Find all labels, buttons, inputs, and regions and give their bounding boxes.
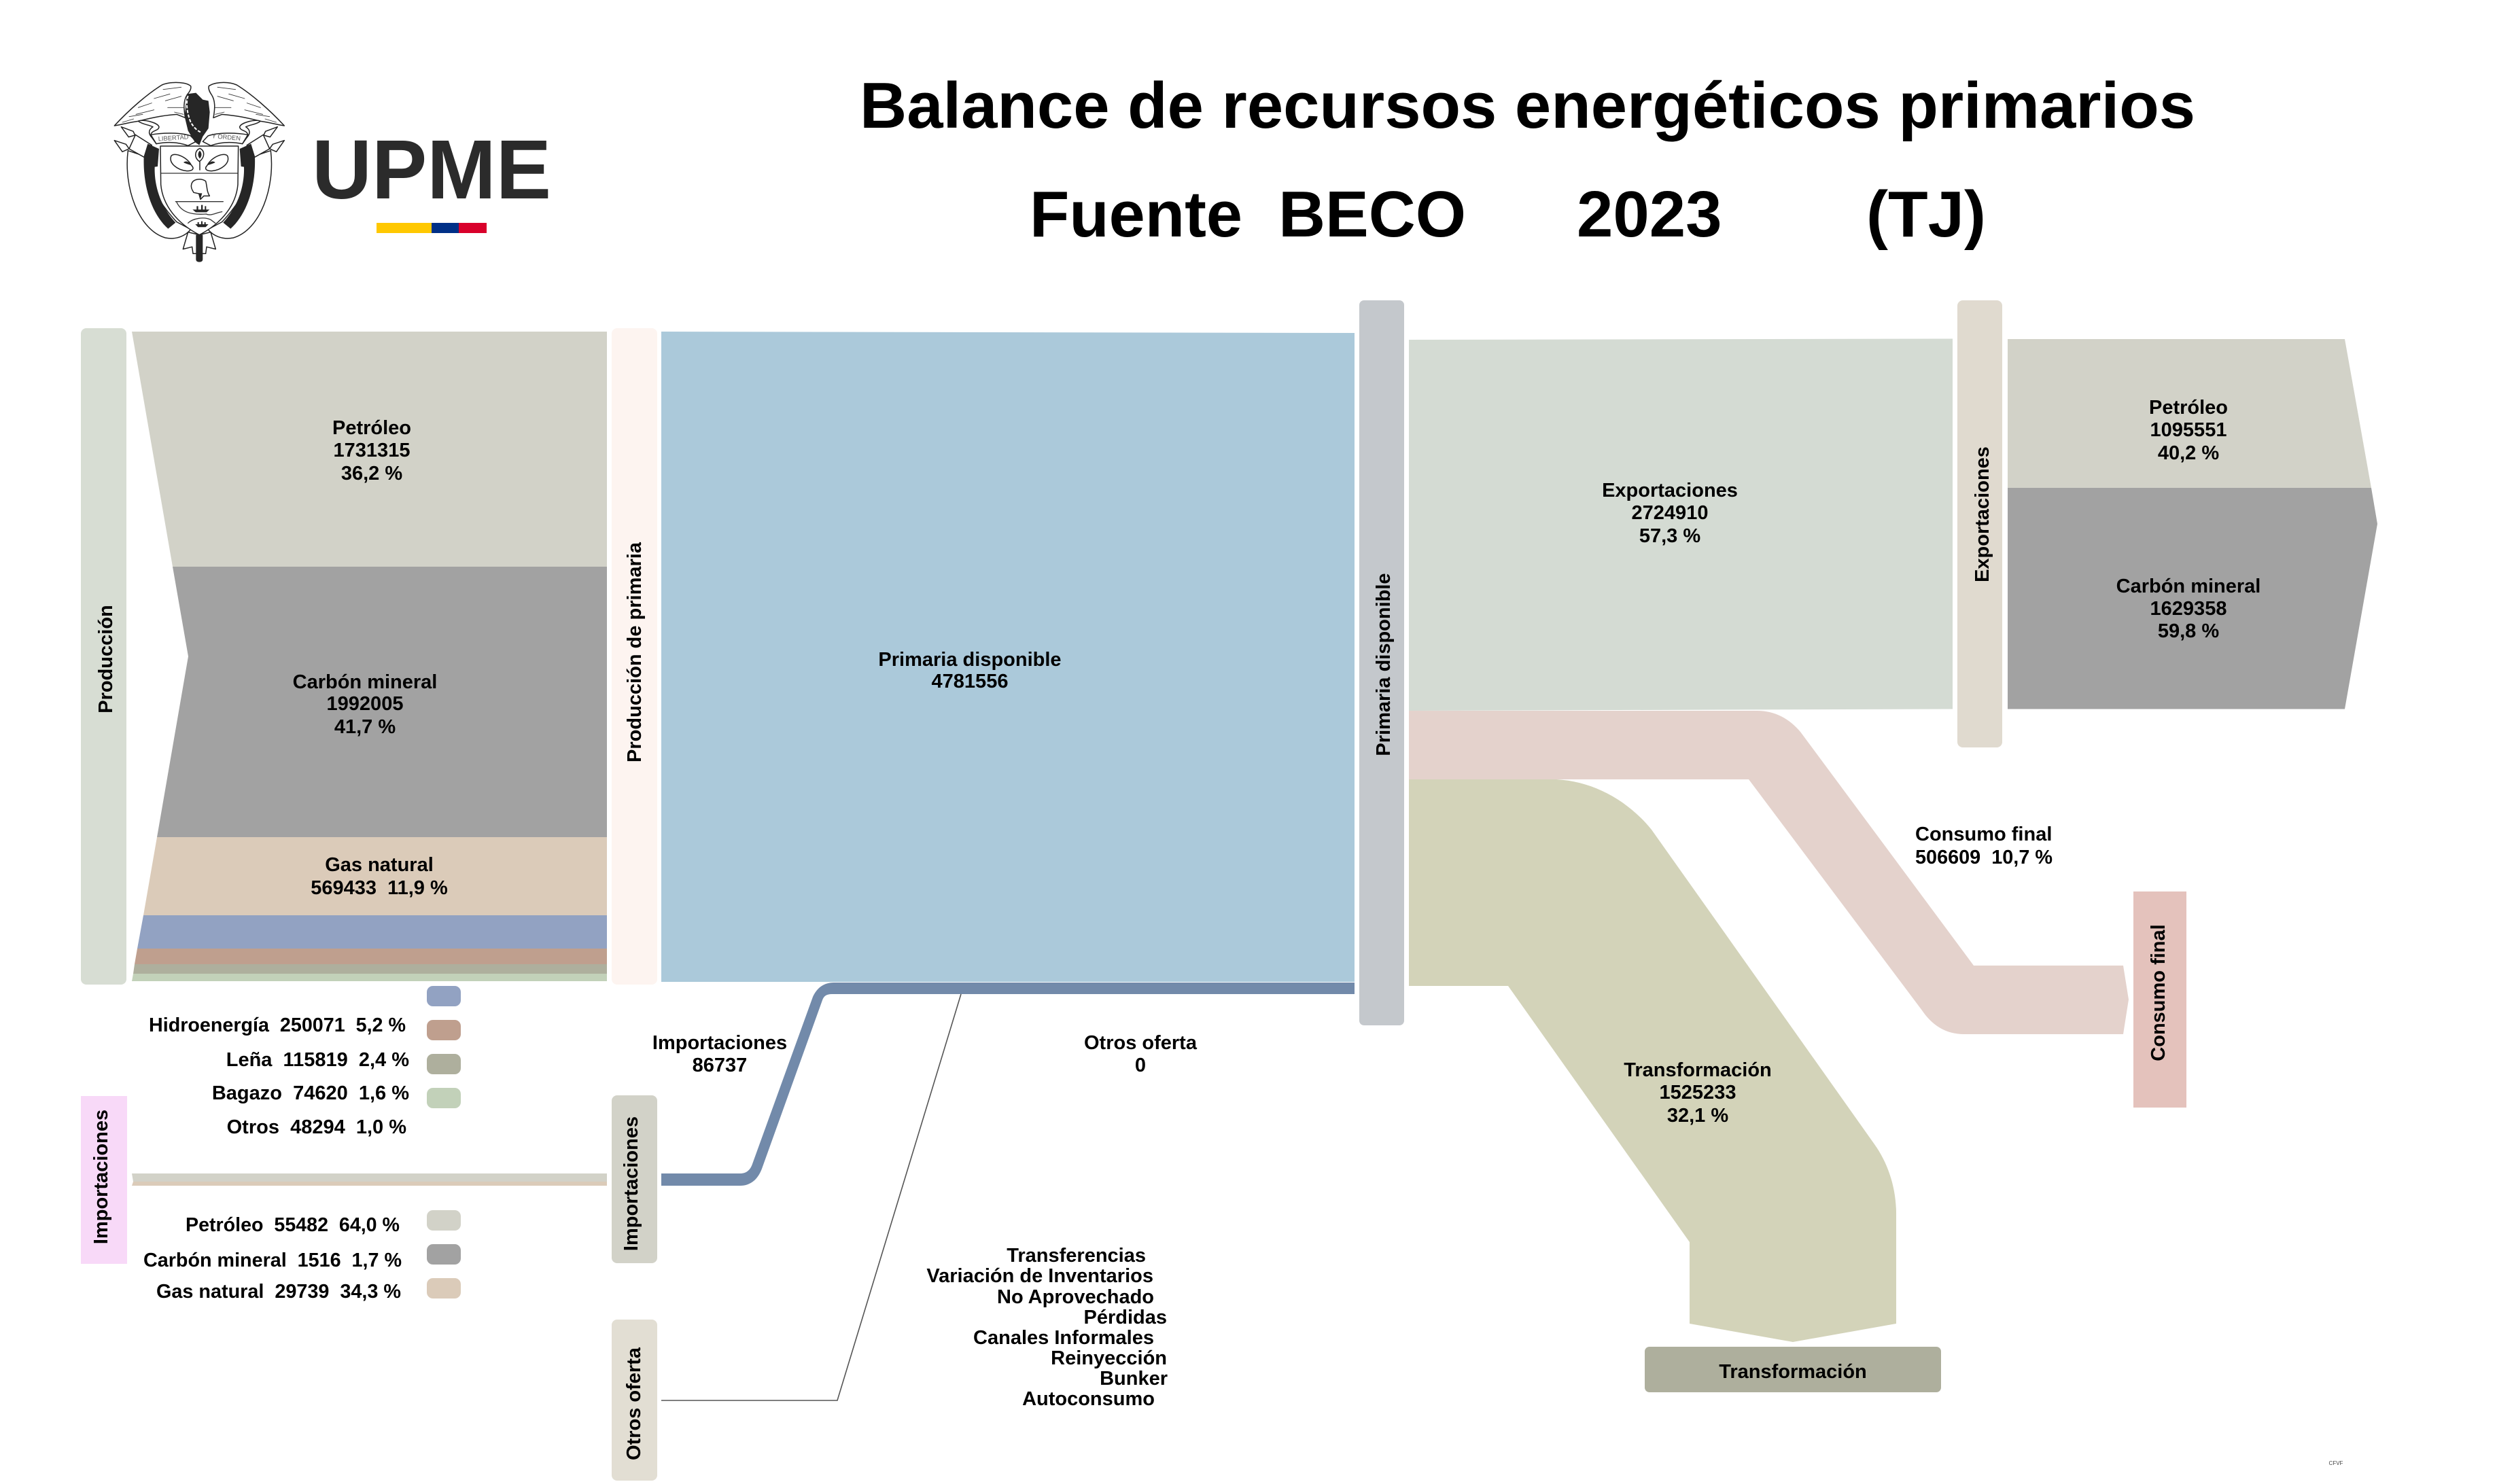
flow: Exportaciones Carbón mineral: 1629358: [2150, 598, 2227, 620]
legend: Carbón mineral: [143, 1244, 461, 1271]
node: Primaria disponible: [1359, 300, 1404, 1025]
legend: Leña: Leña 115819 2,4 %: [226, 1049, 409, 1071]
outer flags: [127, 151, 191, 238]
list: other supply items: [926, 1245, 1168, 1410]
flow: Transformación: 1525233: [1660, 1082, 1736, 1103]
node: Otros oferta: Otros oferta: [623, 1347, 645, 1460]
flow: Exportaciones Carbón mineral: Carbón mineral: [2116, 576, 2260, 597]
label: Importaciones value: 86737: [693, 1055, 747, 1076]
logo: UPME wordmark: UPME: [312, 124, 551, 217]
list: other supply items: Canales Informales: [973, 1327, 1154, 1349]
node: Producción de primaria: [612, 328, 657, 985]
node: Transformación: Transformación: [1719, 1361, 1867, 1383]
flow: imports by source: [132, 1173, 607, 1186]
flow: Exportaciones Petróleo: [2008, 339, 2371, 488]
legend: Otros: [227, 1088, 461, 1138]
flow: Primaria disponible: Primaria disponible: [878, 649, 1062, 671]
label: Consumo final value: 506609 10,7 %: [1915, 847, 2053, 868]
list: other supply items: Autoconsumo: [1022, 1388, 1155, 1410]
flow: Otros: [132, 974, 607, 981]
list: other supply items: Bunker: [1100, 1368, 1168, 1390]
flow: Petróleo: 36,2 %: [341, 463, 402, 484]
node: Exportaciones: Exportaciones: [1972, 446, 1993, 582]
node: Consumo final: Consumo final: [2148, 924, 2169, 1061]
sankey: production flows by source: [132, 332, 607, 981]
footnote mark: CFVF: [2329, 1460, 2343, 1466]
list: other supply items: Pérdidas: [1083, 1307, 1167, 1328]
flow: Importaciones to primary: [661, 983, 1355, 1186]
list: other supply items: Transferencias: [1007, 1245, 1146, 1267]
list: other supply items: Reinyección: [1051, 1347, 1167, 1369]
flow: Otros oferta thin line: [661, 994, 961, 1400]
flow: Bagazo: [133, 964, 607, 974]
legend: production sources: [149, 986, 461, 1138]
node: Transformación: [1645, 1347, 1941, 1392]
flow: Consumo final: [1409, 711, 2129, 1034]
flow: Primaria disponible: [661, 332, 1355, 982]
node: Producción: Producción: [95, 605, 117, 713]
node: Producción: [81, 328, 126, 985]
node: Producción de primaria: Producción de primaria: [624, 542, 646, 762]
flow: Petróleo: Petróleo: [332, 417, 411, 439]
flow: Gas natural: 569433 11,9 %: [311, 877, 448, 899]
black flag bands: [144, 144, 175, 229]
title: [860, 69, 2195, 251]
legend: Carbón mineral: Carbón mineral 1516 1,7 %: [143, 1250, 402, 1271]
flow: Carbón mineral: 41,7 %: [334, 716, 396, 738]
node: Importaciones (right): Importaciones: [621, 1116, 642, 1251]
legend: Petróleo: Petróleo 55482 64,0 %: [186, 1214, 400, 1236]
flow: Exportaciones: 2724910: [1632, 502, 1708, 524]
legend: Hidroenergía: [149, 986, 461, 1036]
label: Consumo final value: Consumo final: [1915, 824, 2052, 845]
label: Otros oferta value: 0: [1135, 1055, 1146, 1076]
flow: Carbón mineral: 1992005: [327, 693, 403, 715]
legend: Petróleo: [186, 1210, 461, 1236]
legend: Hidroenergía: Hidroenergía 250071 5,2 %: [149, 1014, 406, 1036]
wings: [114, 82, 191, 126]
flow: Exportaciones Petróleo: 40,2 %: [2158, 442, 2219, 464]
logo: UPME coat of arms: Y ORDEN: [211, 132, 241, 142]
flow: Petróleo: 1731315: [334, 440, 410, 461]
label: Otros oferta value: [1084, 1032, 1198, 1076]
legend: Gas natural: Gas natural 29739 34,3 %: [156, 1281, 401, 1303]
label: Importaciones value: Importaciones: [652, 1032, 787, 1054]
flow: Exportaciones: Exportaciones: [1602, 480, 1738, 501]
flow: Exportaciones: [1409, 338, 1953, 711]
title: Balance de recursos energéticos primarios: [860, 69, 2195, 142]
node: Primaria disponible: Primaria disponible: [1373, 573, 1395, 756]
logo: UPME coat of arms: LIBERTAD: [158, 133, 189, 143]
legend: Bagazo: [212, 1054, 461, 1104]
node: Importaciones (right): [612, 1095, 657, 1263]
legend: import sources: [143, 1210, 461, 1303]
flow: Exportaciones Carbón mineral: [2008, 488, 2377, 709]
flow: Exportaciones Petróleo: Petróleo: [2149, 397, 2228, 419]
flow: Transformación: [1409, 779, 1896, 1342]
flow: Transformación: 32,1 %: [1667, 1105, 1728, 1127]
motto ribbon: [151, 133, 196, 145]
title: Fuente BECO: [1030, 178, 1466, 251]
flow: Petróleo: [132, 332, 607, 567]
title: (TJ): [1866, 178, 1986, 251]
flow: Exportaciones Petróleo: 1095551: [2150, 419, 2227, 441]
node: Exportaciones: [1957, 300, 2002, 747]
horn and pomegranate: [171, 154, 193, 171]
label: Consumo final value: [1915, 824, 2053, 868]
helmet: [191, 179, 209, 199]
flow: Hidroenergía: [137, 915, 607, 949]
legend: Otros: Otros 48294 1,0 %: [227, 1116, 406, 1138]
legend: Bagazo: Bagazo 74620 1,6 %: [212, 1082, 409, 1104]
ribbon tails: [183, 232, 215, 253]
legend: Leña: [226, 1020, 461, 1071]
eagle body: [185, 93, 210, 145]
label: Otros oferta value: Otros oferta: [1084, 1032, 1198, 1054]
flow: Exportaciones: 57,3 %: [1639, 525, 1700, 547]
node: Otros oferta: [612, 1320, 657, 1481]
flow: Gas natural: [143, 837, 607, 915]
flow: Gas natural: Gas natural: [325, 854, 434, 876]
flow: Transformación: Transformación: [1624, 1059, 1772, 1081]
flow: Exportaciones Carbón mineral: 59,8 %: [2158, 620, 2219, 642]
logo: UPME coat of arms: [114, 82, 284, 262]
list: other supply items: Variación de Inventarios: [926, 1265, 1153, 1287]
flow: Leña: [135, 949, 607, 964]
title: 2023: [1577, 178, 1722, 251]
flow: Carbón mineral: [157, 567, 607, 837]
node: Importaciones (left): [81, 1096, 127, 1264]
shield: [160, 146, 239, 235]
list: other supply items: No Aprovechado: [997, 1286, 1154, 1308]
label: Importaciones value: [652, 1032, 787, 1076]
scroll ends: [138, 120, 159, 144]
flow: Carbón mineral: Carbón mineral: [293, 671, 437, 693]
node: Importaciones (left): Importaciones: [90, 1110, 112, 1244]
ships: [192, 205, 209, 227]
node: Consumo final: [2133, 891, 2186, 1108]
flow: Primaria disponible: 4781556: [932, 671, 1008, 692]
